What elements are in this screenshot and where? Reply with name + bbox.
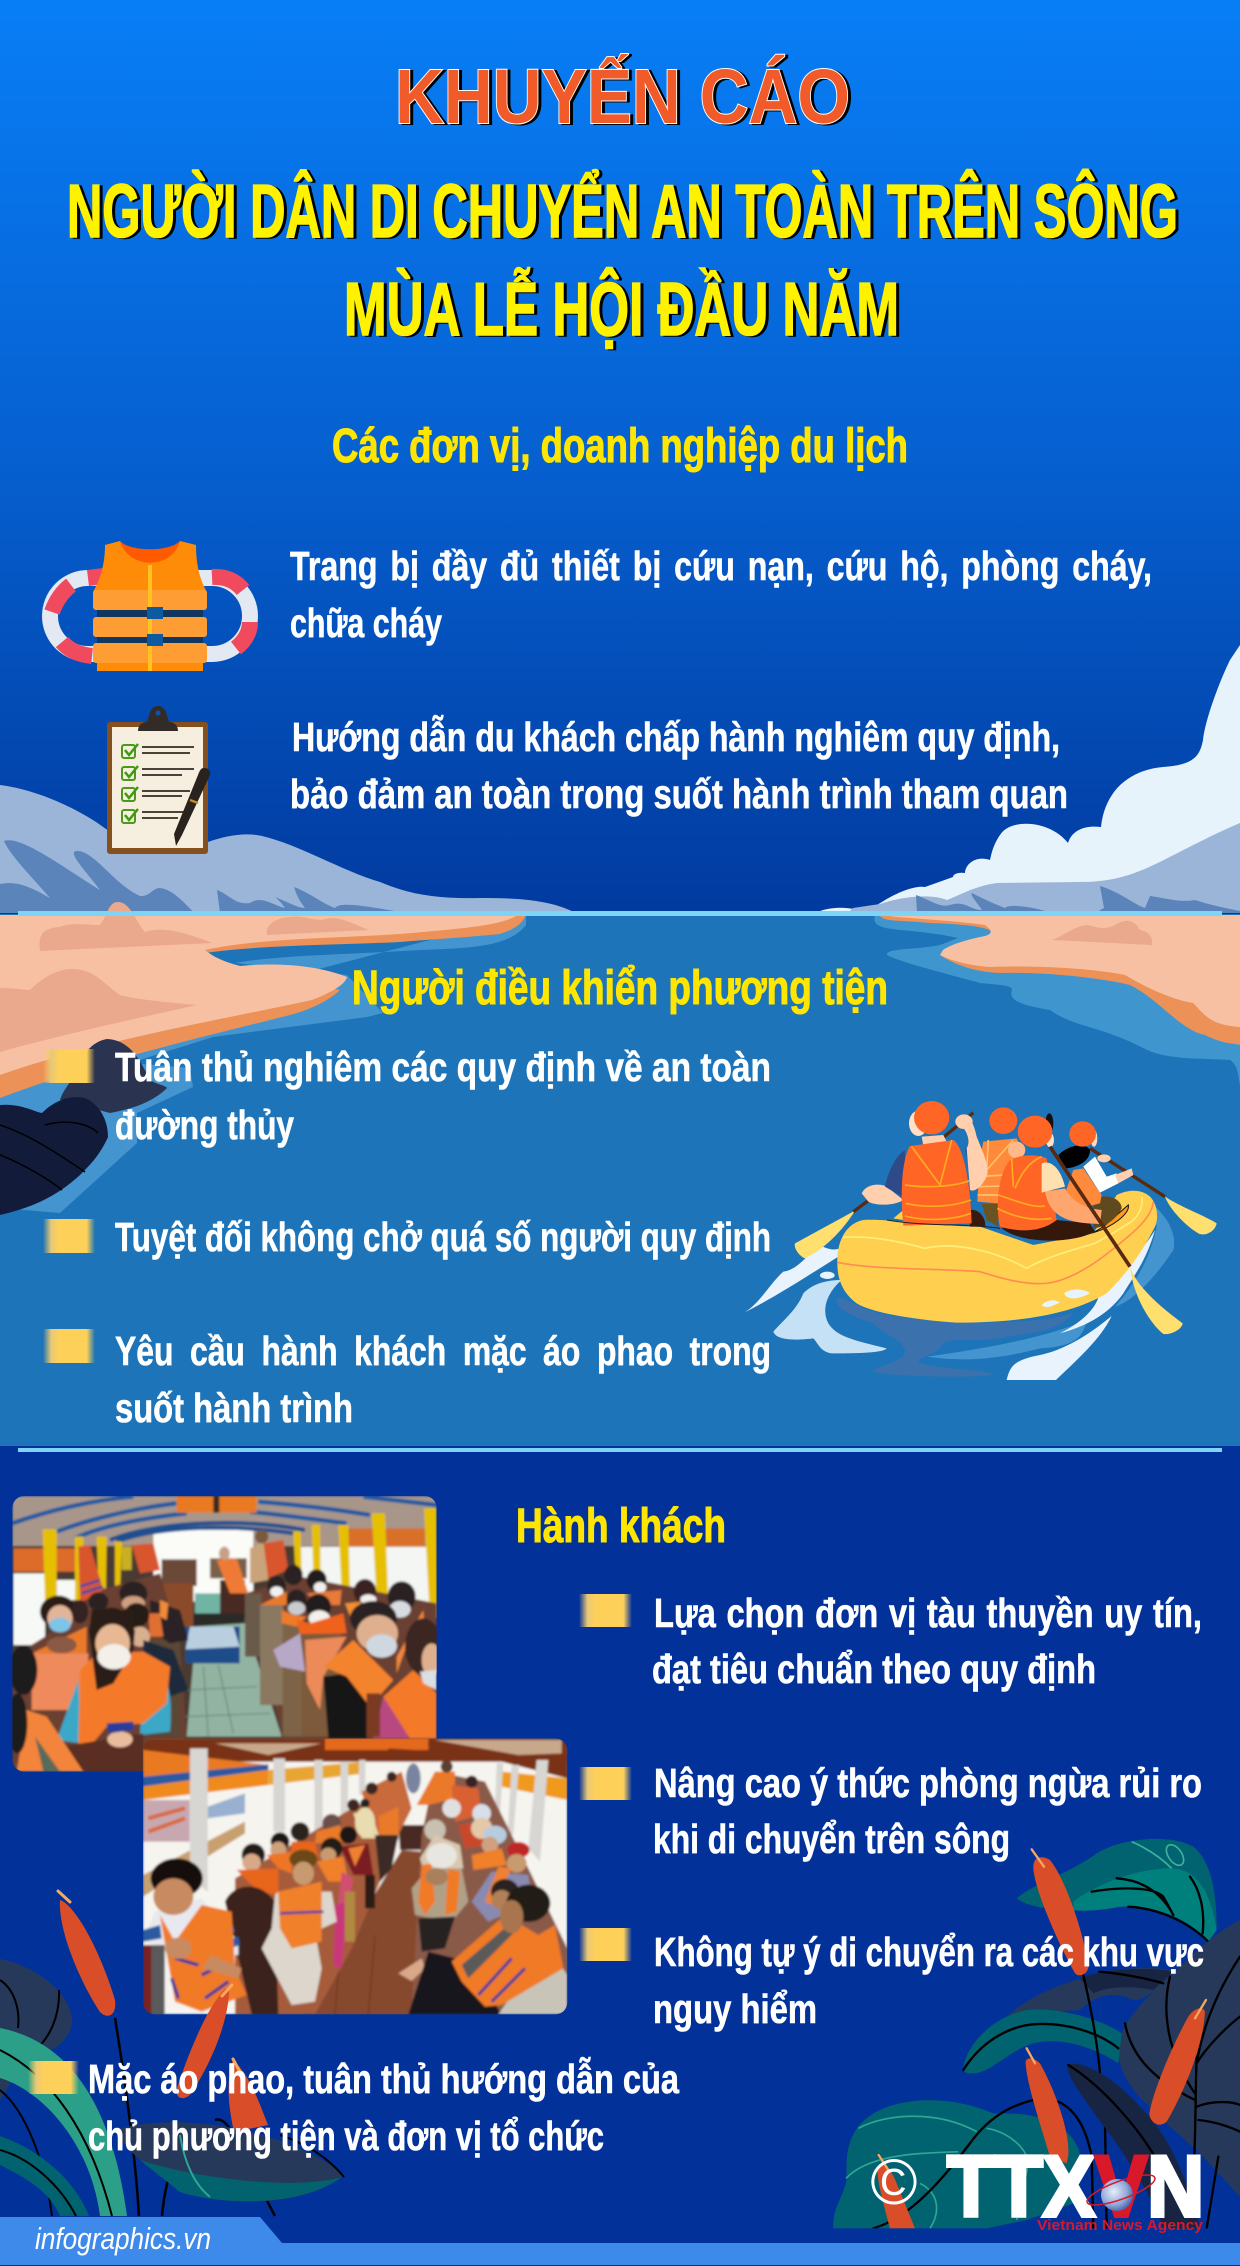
bullet: wear life vest: suốt hành trình [115,1385,353,1431]
bullet: wear life vest: Yêu cầu hành khách mặc áo phao trong [115,1328,771,1374]
bullet: wear life vest [43,1328,771,1431]
logo: copyright mark: © [870,2146,918,2218]
icon: clipboard with checklist and pen [107,706,210,854]
illustration: left shore [0,902,526,1213]
title: KHUYẾN CÁO [395,53,850,140]
footer: website: infographics.vn [35,2221,211,2256]
illustration: left mountains [0,785,576,913]
bullet: no overloading: Tuyệt đối không chở quá số người quy định [115,1214,771,1260]
bullet: choose reputable operator: đạt tiêu chuẩn theo quy định [652,1646,1096,1692]
illustration: right plants [833,1839,1240,2228]
text block: equipment: chữa cháy [290,600,442,646]
illustration: right mountains [848,823,1240,913]
bullet: avoid dangerous areas: nguy hiểm [653,1986,817,2032]
illustration: right shore [874,915,1240,1085]
bullet: choose reputable operator [579,1590,1202,1692]
illustration: rafting team [744,1101,1217,1380]
bullet: wear vest, follow instructions: chủ phương tiện và đơn vị tổ chức [88,2113,604,2159]
section background: passengers [0,1446,1240,2266]
bullet: avoid dangerous areas [579,1928,1204,2032]
text block: equipment [290,543,1152,646]
section background: sky [0,0,1240,916]
bullet: safety rules: đường thủy [115,1102,294,1148]
logo: globe [1084,2169,1158,2211]
bullet: wear vest, follow instructions [28,2056,680,2159]
bullet: safety rules [43,1044,771,1148]
divider: lower line [18,1448,1222,1452]
text block: guide visitors: bảo đảm an toàn trong suốt hành trình tham quan [290,771,1068,817]
text block: guide visitors [290,714,1068,817]
photo: passengers in life vests, boat one [7,1496,442,1772]
photo: passengers in life vests, boat two [143,1738,567,2015]
heading: vehicle operators: Người điều khiển phương tiện [352,962,888,1015]
title [67,53,1178,351]
logo: TTXVN [870,2139,1204,2235]
icon: life vest and ring [50,541,250,671]
heading: passengers: Hành khách [516,1500,726,1553]
bullet: risk awareness [579,1760,1202,1862]
bullet: wear vest, follow instructions: Mặc áo phao, tuân thủ hướng dẫn của [88,2056,680,2102]
logo: agency name: Vietnam News Agency [1037,2217,1204,2234]
heading: tourism businesses: Các đơn vị, doanh nghiệp du lịch [332,420,908,473]
illustration: right clouds [860,645,1240,913]
backing rows [235,1785,402,2014]
backing rows [12,1573,437,1772]
divider: top line [18,911,1222,916]
bullet: risk awareness: khi di chuyển trên sông [653,1816,1010,1862]
illustration: small distant cloud [815,908,868,913]
section background: river [0,914,1240,1447]
bullet: safety rules: Tuân thủ nghiêm các quy định về an toàn [115,1044,771,1090]
title: MÙA LỄ HỘI ĐẦU NĂM [344,267,899,351]
footer bar [0,2217,1240,2265]
illustration: rock at left shore [0,1039,167,1215]
illustration: left plants [0,1891,344,2216]
logo: wordmark: TTXVN [947,2139,1204,2235]
